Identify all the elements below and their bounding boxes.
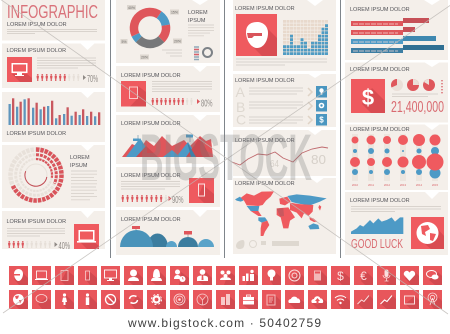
heading: radial: IPSUM bbox=[70, 163, 88, 169]
heading: radial: LOREM bbox=[70, 155, 90, 161]
icon: speech bbox=[32, 290, 51, 309]
line chart: 64 bbox=[270, 159, 279, 170]
icon: heart bbox=[400, 266, 419, 285]
text block: closing bbox=[351, 206, 441, 212]
heading: mountains: LOREM IPSUM DOLOR bbox=[121, 121, 181, 127]
icon: globe tile bbox=[411, 217, 444, 249]
watermark url: www.bigstock.com · 50402759 bbox=[127, 316, 321, 330]
bubble chart: 2010 bbox=[352, 183, 359, 187]
area chart bbox=[351, 217, 403, 234]
ABC list bbox=[236, 84, 327, 128]
icon: cloud upload bbox=[308, 290, 327, 309]
heading: bars section: LOREM IPSUM DOLOR bbox=[350, 7, 410, 13]
icon: globe bbox=[9, 290, 28, 309]
pie charts bbox=[391, 79, 442, 94]
column dividers bbox=[110, 0, 340, 258]
closing text: GOOD LUCK bbox=[351, 237, 403, 251]
heading: monitor section: LOREM IPSUM DOLOR bbox=[6, 48, 66, 54]
bubble chart: 2015 bbox=[432, 183, 439, 187]
heading: map: LOREM IPSUM DOLOR bbox=[235, 181, 295, 187]
text block: tablet bbox=[152, 82, 212, 92]
icon: person with clock bbox=[170, 266, 189, 285]
icon: calculator bbox=[308, 266, 327, 285]
icon: group bbox=[216, 266, 235, 285]
icon: euro: € bbox=[360, 269, 367, 283]
icon: cloud bbox=[285, 290, 304, 309]
people row 80 percent: 80% bbox=[201, 98, 213, 110]
panel: column 3 bbox=[233, 0, 336, 254]
icon: line chart bbox=[377, 290, 396, 309]
donut labels: 40% bbox=[128, 6, 135, 10]
icon: man bbox=[124, 266, 143, 285]
icon: euro bbox=[354, 266, 373, 285]
icon: refresh bbox=[124, 290, 143, 309]
text block: donut note bbox=[162, 50, 182, 56]
icon: chat bbox=[423, 266, 442, 285]
radial chart bbox=[10, 150, 62, 200]
icon: tv bbox=[400, 290, 419, 309]
icon: no sign bbox=[101, 290, 120, 309]
people row 40 percent bbox=[8, 241, 70, 252]
icon: antenna bbox=[423, 290, 442, 309]
heading: head section: LOREM IPSUM DOLOR bbox=[235, 6, 295, 12]
donut chart bbox=[134, 12, 166, 44]
heading: line chart: LOREM IPSUM DOLOR bbox=[235, 138, 295, 144]
ABC list: A bbox=[236, 84, 246, 100]
text block: donut bbox=[188, 25, 214, 36]
text block: monitor bbox=[37, 58, 96, 68]
icon: head bbox=[9, 266, 28, 285]
bubble chart: 2011 bbox=[368, 183, 374, 187]
horizontal bar chart bbox=[351, 18, 444, 53]
heading: donut: IPSUM bbox=[188, 18, 206, 24]
icon: wifi bbox=[331, 290, 350, 309]
donut labels: 5% bbox=[121, 40, 127, 44]
people row 80 percent bbox=[152, 98, 213, 110]
icon: dollar bbox=[331, 266, 350, 285]
line chart: 80 bbox=[311, 152, 326, 167]
heading: tablet section: LOREM IPSUM DOLOR bbox=[121, 73, 181, 79]
icon: phone bbox=[78, 266, 97, 285]
map legend bbox=[236, 240, 299, 249]
icon: documents bbox=[216, 290, 235, 309]
icon: phone tile bbox=[189, 178, 214, 203]
icon: bulb bbox=[262, 266, 281, 285]
donut labels: 15% bbox=[171, 10, 178, 14]
icon: monitor tile bbox=[7, 57, 32, 82]
heading: ABC list: LOREM IPSUM DOLOR bbox=[235, 78, 295, 84]
icon: dollar: $ bbox=[337, 269, 344, 283]
icon: circle mark bbox=[193, 290, 212, 309]
heading: laptop section: LOREM IPSUM DOLOR bbox=[6, 219, 66, 225]
hill chart bbox=[120, 226, 214, 247]
bubble chart: 2014 bbox=[416, 183, 423, 187]
panel: column 4 bbox=[345, 0, 448, 255]
panel: column 2 bbox=[116, 0, 220, 255]
icon: laptop bbox=[32, 266, 51, 285]
icon: man figure bbox=[78, 290, 97, 309]
grid chart bbox=[284, 20, 326, 55]
icon: head tile bbox=[236, 14, 277, 56]
people row 70 percent bbox=[37, 74, 98, 85]
icon: at sign bbox=[285, 266, 304, 285]
text block: money bbox=[392, 94, 438, 96]
icon: laptop tile bbox=[74, 224, 99, 249]
world map bbox=[235, 191, 327, 236]
bubble chart: 2013 bbox=[400, 183, 407, 187]
text block: laptop bbox=[7, 228, 65, 236]
heading: donut: LOREM bbox=[188, 10, 208, 16]
icon: target bbox=[170, 290, 189, 309]
icon: person with tie bbox=[193, 266, 212, 285]
heading: money section: LOREM IPSUM DOLOR bbox=[350, 67, 410, 73]
icon: woman figure bbox=[55, 290, 74, 309]
bubble chart: 2012 bbox=[384, 183, 391, 187]
icon: bars and person bbox=[239, 266, 258, 285]
donut labels bbox=[120, 5, 182, 60]
donut labels: 20% bbox=[141, 55, 148, 59]
ABC list: $ bbox=[319, 116, 324, 124]
icon: microphone bbox=[377, 266, 396, 285]
icon strip: bottom row bbox=[9, 290, 442, 309]
heading: bubbles: LOREM IPSUM DOLOR bbox=[350, 127, 410, 133]
panel: column 1 bbox=[2, 0, 105, 249]
people row 70 percent: 70% bbox=[87, 74, 98, 85]
mountain chart bbox=[122, 134, 213, 157]
icon: woman bbox=[147, 266, 166, 285]
heading: phone section: LOREM IPSUM DOLOR bbox=[121, 173, 181, 179]
heading: hills: LOREM IPSUM DOLOR bbox=[121, 217, 181, 223]
bubble chart bbox=[350, 134, 444, 187]
text block: phone bbox=[121, 182, 180, 189]
icon: dollar tile bbox=[351, 79, 385, 113]
heading: intro: LOREM IPSUM DOLOR bbox=[7, 22, 67, 28]
text block: intro bbox=[7, 30, 97, 34]
ABC list: B bbox=[236, 99, 245, 115]
icon: note bbox=[262, 290, 281, 309]
icon: monitor bbox=[101, 266, 120, 285]
ABC list: C bbox=[236, 112, 246, 128]
bar chart bbox=[8, 98, 100, 125]
heading: bars: LOREM IPSUM DOLOR bbox=[6, 131, 66, 137]
title: INFOGRAPHIC bbox=[7, 2, 98, 22]
icon: briefcase bbox=[239, 290, 258, 309]
icon: dollar tile: $ bbox=[362, 85, 374, 110]
line chart bbox=[232, 147, 328, 170]
donut labels: 20% bbox=[174, 39, 181, 43]
icon strip: top row bbox=[9, 266, 442, 285]
icon: tablet tile bbox=[121, 81, 146, 106]
icon: tablet bbox=[55, 266, 74, 285]
text block: radial bbox=[71, 171, 97, 200]
mini legend bbox=[194, 47, 212, 60]
people row 90 percent bbox=[122, 195, 184, 206]
icon: line chart light bbox=[354, 290, 373, 309]
text block: head section bbox=[236, 59, 327, 65]
people row 90 percent: 90% bbox=[172, 195, 184, 206]
people row 40 percent: 40% bbox=[58, 241, 70, 252]
icon: gear bbox=[147, 290, 166, 309]
heading: closing section: LOREM IPSUM DOLOR bbox=[350, 198, 410, 204]
